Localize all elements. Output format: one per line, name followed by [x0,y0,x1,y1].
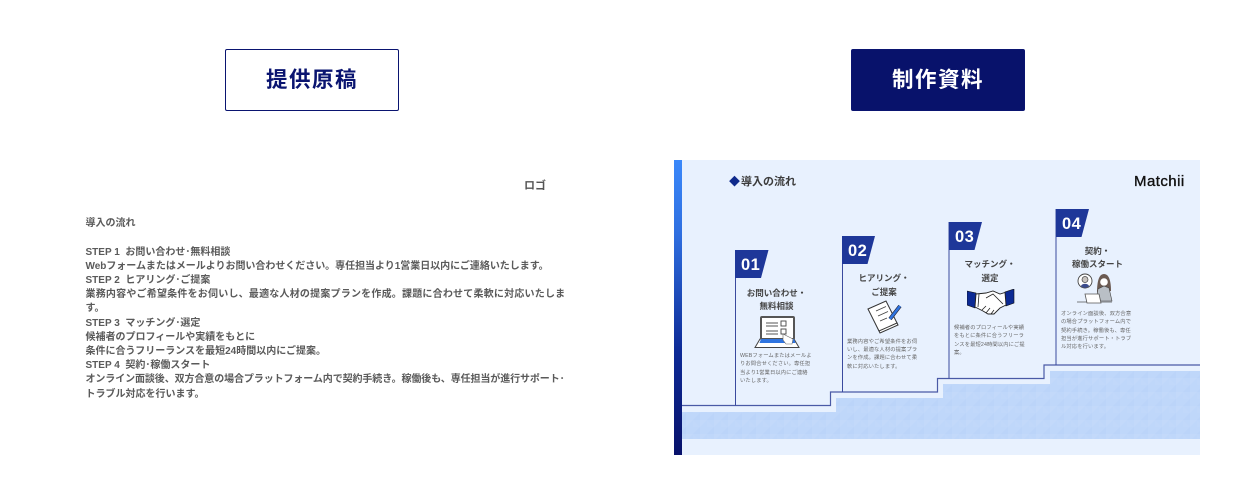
text: logo placeholder: ロゴ [524,180,546,192]
step title: お問い合わせ・ [747,288,806,298]
text block: original manuscript: 業務内容やご希望条件をお伺いし、最適な人材の提案プランを作成。課題に合わせて柔軟に対応いたしま [86,289,565,300]
text block: original manuscript: 候補者のプロフィールや実績をもとに [86,332,255,343]
text block: original manuscript: STEP 1 お問い合わせ･無料相談 [86,247,230,258]
step 02 [847,242,917,370]
description: 案。 [954,350,965,356]
text block: original manuscript: STEP 4 契約･稼働スタート [86,360,210,371]
number: 02 [848,242,867,260]
number: 03 [955,228,974,246]
step title: ヒアリング・ [858,273,910,283]
description: ル対応を行います。 [1061,344,1109,350]
step title: 稼働スタート [1072,259,1123,269]
text block: original manuscript: トラブル対応を行います。 [86,389,204,400]
description: いたします。 [740,378,772,384]
description: 業務内容やご希望条件をお伺 [847,338,917,344]
heading: 導入の流れ: ◆導入の流れ [729,176,796,188]
text block: original manuscript: STEP 2 ヒアリング･ご提案 [86,275,210,286]
description: 契約手続き。稼働後も、専任 [1061,328,1131,334]
description [954,324,1025,356]
description: ンを作成。課題に合わせて柔 [847,355,917,361]
description: 当より1営業日以内にご連絡 [740,370,808,376]
text block: original manuscript: Webフォームまたはメールよりお問い合わせください。専任担当より1営業日以内にご連絡いたします。 [86,261,549,272]
step title: 契約・ [1085,246,1110,256]
icon: document and pen [867,300,902,334]
icon: handshake [967,289,1014,314]
text block: original manuscript: オンライン面談後、双方合意の場合プラットフォーム内で契約手続き。稼働後も、専任担当が進行サポート･ [86,374,564,385]
step title: 無料相談 [759,301,794,311]
icon: online meeting [1077,274,1112,304]
description [1061,310,1131,350]
text block: original manuscript: STEP 3 マッチング･選定 [86,318,200,329]
step 03 [954,228,1025,356]
text block: original manuscript: す。 [86,303,104,314]
description: いし、最適な人材の提案プラ [847,347,917,353]
description: ンスを最短24時間以内にご提 [954,342,1025,348]
description [740,352,812,384]
logo: Matchii: Matchii [1134,172,1185,190]
text block: original manuscript: 導入の流れ [86,218,136,229]
description: 軟に対応いたします。 [847,364,900,370]
step 04 [1061,215,1131,350]
description: オンライン面談後、双方合意 [1061,311,1131,317]
number: 04 [1062,215,1081,233]
button: 提供原稿 [225,49,399,111]
gradient side bar [674,160,682,455]
step title [858,273,910,296]
step title: 選定 [981,272,998,282]
stair graphic [682,209,1200,439]
button: 提供原稿: 提供原稿 [266,68,358,92]
description [847,338,917,370]
button: 制作資料: 制作資料 [892,68,984,92]
button: 制作資料 [851,49,1025,111]
number: 01 [741,256,760,274]
text block: original manuscript: 条件に合うフリーランスを最短24時間以内にご提案。 [86,346,326,357]
description: 候補者のプロフィールや実績 [954,325,1024,331]
description: の場合プラットフォーム内で [1061,319,1131,325]
step title [747,288,806,311]
description: をもとに条件に合うフリーラ [954,333,1024,339]
step title [1072,246,1123,269]
description: りお問合せください。専任担 [740,361,810,367]
step title [964,259,1016,282]
description: 担当が進行サポート・トラブ [1061,336,1131,342]
icon: laptop form [754,316,800,348]
step title: ご提案 [871,286,897,296]
step 01 [740,256,812,384]
step title: マッチング・ [964,259,1016,269]
panel: produced slide [674,160,1200,455]
text block: original manuscript [86,217,565,400]
description: WEBフォームまたはメールよ [740,353,812,359]
